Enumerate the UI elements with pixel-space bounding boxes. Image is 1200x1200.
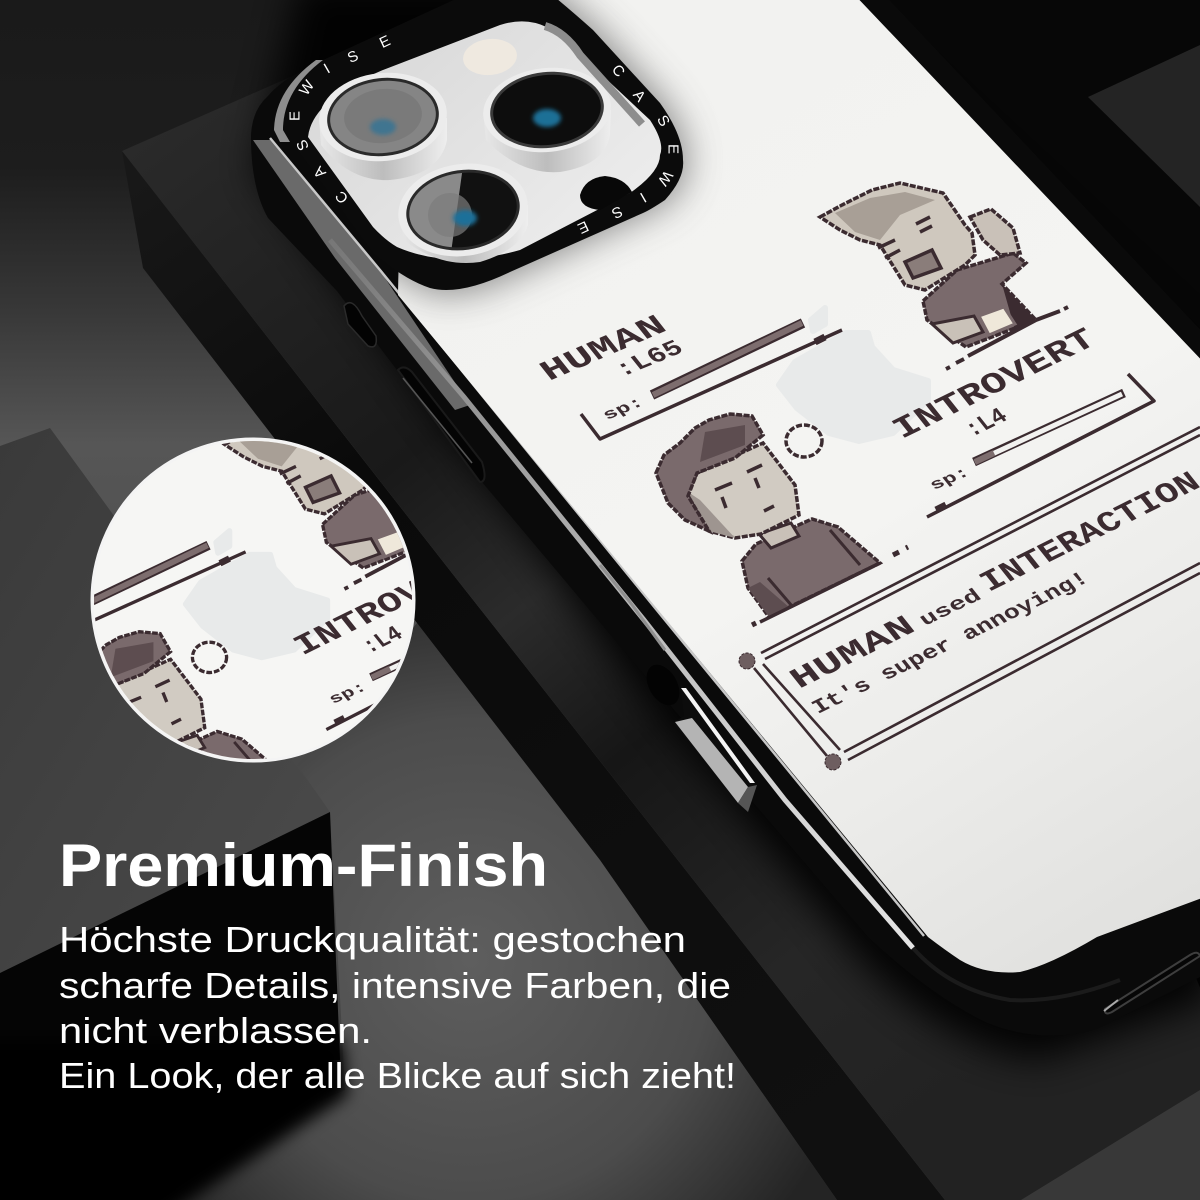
port: bottom speaker <box>1104 953 1200 1013</box>
button: mute switch <box>344 303 376 347</box>
ring brand text: A <box>310 163 330 181</box>
lower corner sheen <box>913 948 1120 1000</box>
upper character face details <box>878 217 932 258</box>
upper character head <box>820 183 975 290</box>
lower character face <box>688 443 799 538</box>
message: INTERACTION: INTERACTION <box>973 467 1200 600</box>
ring brand text: E <box>664 144 682 154</box>
ring brand text: E <box>377 32 393 52</box>
body line 4: Ein Look, der alle Blicke auf sich zieht! <box>59 1055 736 1096</box>
label: INTROVERT level: :L4 <box>960 404 1014 443</box>
ring brand text: E <box>575 217 591 237</box>
lower character body <box>742 519 880 617</box>
inset apple logo <box>186 531 327 657</box>
ring brand text <box>286 32 682 237</box>
lens 3 <box>398 164 520 263</box>
clear case grey band near camera <box>253 140 470 410</box>
thin light line on screen edge <box>270 138 924 936</box>
label: HUMAN: HUMAN <box>533 310 675 389</box>
ring brand text: S <box>653 112 673 130</box>
silver reflection stripe <box>330 240 913 948</box>
background: small block dark face <box>0 812 348 1200</box>
body line 1: Höchste Druckqualität: gestochen <box>59 919 686 960</box>
label: HUMAN level: :L65 <box>610 336 690 383</box>
inset label: level: :L4 <box>357 622 408 659</box>
body line 3: nicht verblassen. <box>59 1010 372 1051</box>
label: introvert sp: sp: <box>926 464 974 494</box>
ring brand text: E <box>286 111 304 121</box>
phone back printed surface <box>398 0 1200 972</box>
pixel art game scene <box>533 183 1200 770</box>
camera island shadow on surface <box>398 0 710 318</box>
ring brand text: A <box>629 87 649 105</box>
lidar hole <box>580 176 632 210</box>
heading: Premium-Finish <box>59 832 548 899</box>
background: lit block face <box>90 623 837 1200</box>
inset label: sp: sp: <box>325 679 371 708</box>
button: silver side <box>640 659 757 812</box>
button: volume <box>398 367 485 482</box>
ring brand text: S <box>293 137 313 153</box>
introvert status: HP bar and bracket <box>927 374 1154 517</box>
ring brand text: W <box>296 77 319 99</box>
inset disc <box>92 439 414 761</box>
message: used: used <box>914 585 986 631</box>
phone black body <box>251 0 1200 1036</box>
flash <box>461 36 519 78</box>
upper character raised arm <box>970 209 1020 255</box>
apple logo watermark <box>779 308 928 441</box>
lens 1 <box>315 67 451 180</box>
magnifier inset <box>90 438 416 762</box>
inset sprite copy <box>94 441 406 759</box>
inset label: INTROVERT: INTROVERT <box>288 546 495 663</box>
message box corner studs <box>739 653 755 669</box>
label: human sp: sp: <box>599 394 648 424</box>
background: top right block <box>1088 45 1200 207</box>
message: second line: It's super annoying! <box>808 568 1094 719</box>
background: small block top surface <box>0 428 330 973</box>
upper character hand <box>932 316 983 343</box>
camera island <box>274 0 683 290</box>
ring brand text: C <box>608 61 628 81</box>
message box frame <box>739 427 1200 770</box>
body text <box>59 919 736 1096</box>
background: large block front face <box>122 151 945 1200</box>
upper character torso <box>923 253 1036 347</box>
background: lower right block <box>1021 1090 1200 1200</box>
grey case strip beside island <box>274 60 325 142</box>
lower character eyes and mouth <box>715 465 774 511</box>
human status: HP bar and bracket <box>581 323 842 439</box>
ring brand text: S <box>345 47 361 67</box>
lens 2 <box>479 62 615 172</box>
label: INTROVERT: INTROVERT <box>885 322 1104 447</box>
lower character <box>656 414 908 625</box>
camera ring <box>283 0 683 290</box>
message: HUMAN: HUMAN <box>783 610 923 697</box>
ring brand text: W <box>653 167 676 189</box>
upper character book <box>979 307 1015 335</box>
inset zoomed artwork <box>94 441 412 759</box>
ring brand text: I <box>637 189 649 205</box>
phone drop shadow <box>255 0 1200 1060</box>
thought bubble <box>786 425 822 457</box>
outer reflection near button <box>600 565 665 650</box>
ring brand text: S <box>609 202 625 222</box>
ring brand text: I <box>321 61 333 77</box>
lower character neck <box>759 523 799 548</box>
phone case <box>251 0 1200 1060</box>
ring brand text: C <box>332 187 352 207</box>
camera glass <box>308 21 661 259</box>
upper character <box>820 183 1068 369</box>
background: top right dark zone <box>800 0 1200 1000</box>
body line 2: scharfe Details, intensive Farben, die <box>59 965 731 1006</box>
glass edge reflection <box>545 26 642 124</box>
lower character hair <box>656 414 763 531</box>
